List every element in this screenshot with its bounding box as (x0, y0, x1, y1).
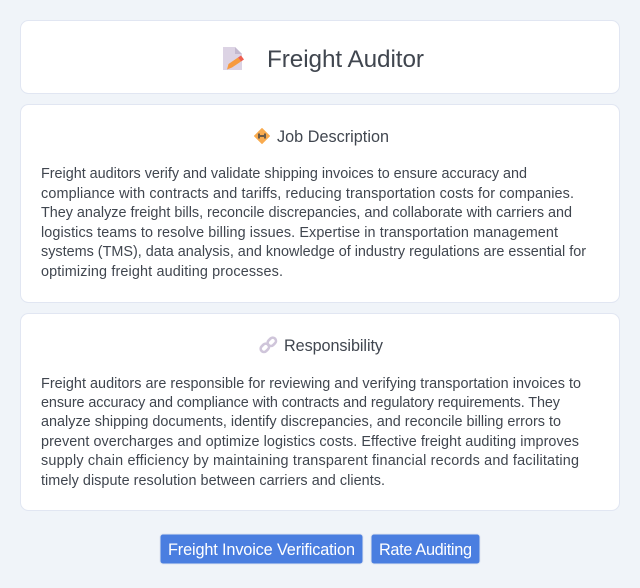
text block: job description: logistics teams to resolve billing issues. Expertise in transportation management (41, 225, 558, 241)
text block: job description (41, 166, 586, 280)
text block: responsibility: supply chain efficiency by maintaining transparent financial records and facilitating (41, 453, 579, 469)
panel: job description (20, 104, 620, 302)
text block: responsibility: timely dispute resolution between carriers and clients. (41, 473, 385, 489)
text block: responsibility: Freight auditors are responsible for reviewing and verifying transportation invoices to (41, 376, 581, 392)
text block: job description: Freight auditors verify and validate shipping invoices to ensure accuracy and (41, 166, 527, 182)
text block: responsibility: analyze shipping documents, identify discrepancies, and reconcile billing errors to (41, 414, 561, 430)
text block: job description: compliance with contracts and tariffs, reducing transportation costs for companies. (41, 186, 574, 202)
tag: freight invoice verification: Freight Invoice Verification (168, 541, 355, 559)
text block: responsibility (41, 376, 581, 489)
icon: orange diamond (254, 128, 270, 144)
panel: responsibility (20, 314, 620, 510)
tag: rate auditing (371, 534, 480, 564)
text block: job description: optimizing freight auditing processes. (41, 264, 283, 280)
text block: job description: They analyze freight bills, reconcile discrepancies, and collaborate with carriers and (41, 205, 572, 221)
panel: title card (20, 20, 620, 94)
heading: job description: Job Description (277, 128, 389, 146)
icon: chain link (259, 336, 277, 353)
text block: responsibility: ensure accuracy and compliance with contracts and regulatory requirements. They (41, 395, 561, 411)
heading: responsibility: Responsibility (284, 337, 384, 355)
tag: rate auditing: Rate Auditing (379, 541, 472, 559)
icon: document with pencil (223, 47, 244, 70)
title: Freight Auditor (267, 46, 424, 73)
text block: responsibility: prevent overcharges and optimize logistics costs. Effective freight auditing improves (41, 434, 579, 450)
text block: job description: systems (TMS), data analysis, and knowledge of industry regulations are essential for (41, 244, 586, 260)
tag: freight invoice verification (160, 534, 363, 564)
